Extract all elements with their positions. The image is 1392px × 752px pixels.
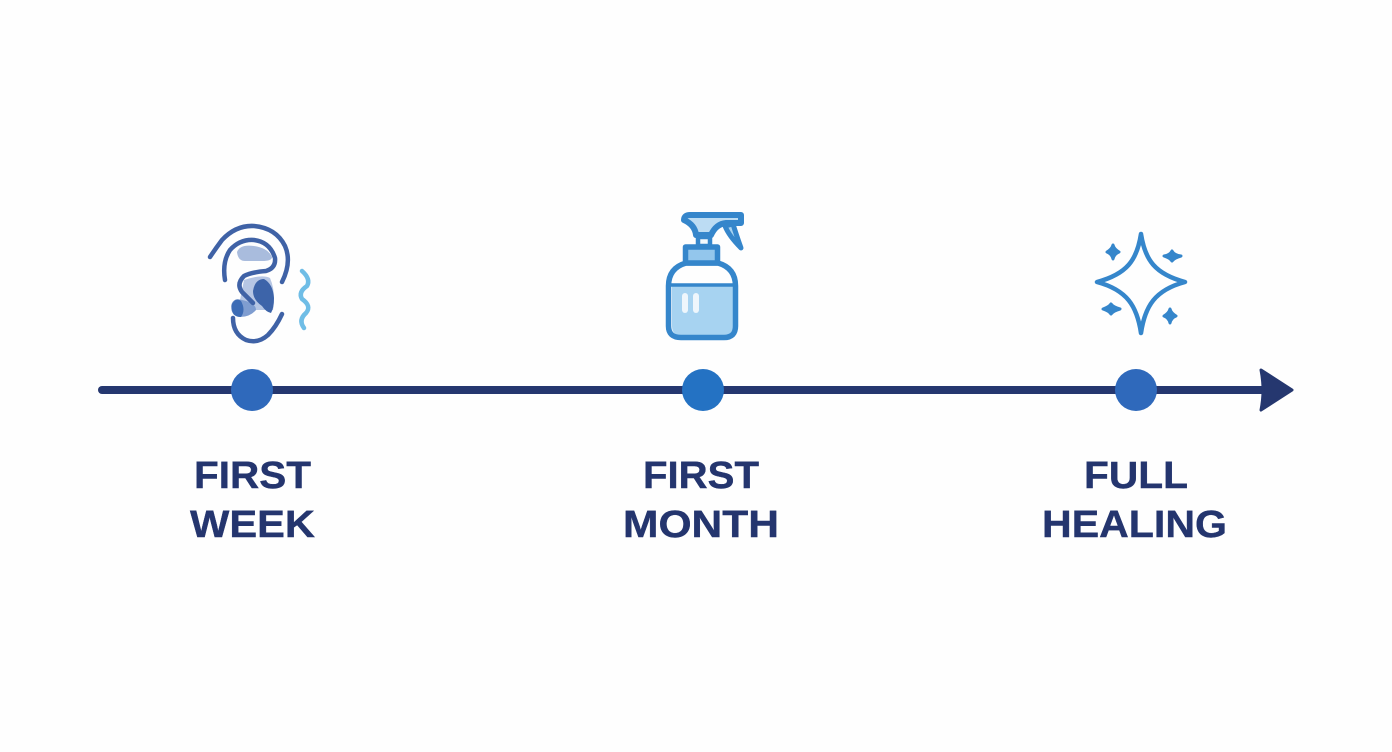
- timeline axis line: [102, 386, 1270, 394]
- icon: ear with sound wave: [210, 226, 308, 341]
- bottle collar: [686, 247, 718, 263]
- spray head: [684, 215, 741, 235]
- marker: full healing: [1115, 369, 1157, 411]
- liquid level line: [668, 283, 736, 287]
- sound wave: [301, 271, 308, 328]
- icon: sparkles: [1097, 234, 1185, 333]
- ear outer helix: [210, 226, 288, 282]
- label: first week: WEEK: [190, 504, 316, 546]
- label: full healing: HEALING: [1042, 504, 1227, 546]
- bottle liquid: [672, 286, 733, 336]
- small sparkle bottom right: [1164, 309, 1176, 323]
- label: first month: [623, 455, 779, 546]
- label: first week: [190, 455, 316, 546]
- ear inner fill shapes: [237, 246, 272, 261]
- bottle body: [668, 263, 736, 338]
- marker: first month: [682, 369, 724, 411]
- ear inner curve: [224, 240, 275, 303]
- liquid highlights: [685, 296, 696, 310]
- small sparkle top right: [1164, 251, 1181, 261]
- label: first month: FIRST: [643, 455, 759, 497]
- timeline: [102, 369, 1292, 411]
- label: full healing: FULL: [1084, 455, 1188, 497]
- label: first week: FIRST: [194, 455, 311, 497]
- label: first month: MONTH: [623, 504, 779, 546]
- label: full healing: [1042, 455, 1227, 546]
- spray trigger: [725, 224, 741, 248]
- marker: first week: [231, 369, 273, 411]
- arrow head: [1261, 370, 1292, 410]
- icon: spray bottle: [668, 215, 741, 338]
- sprayer neck: [698, 237, 710, 246]
- small sparkle bottom left: [1103, 304, 1120, 314]
- large star: [1097, 234, 1185, 333]
- small sparkle top left: [1107, 245, 1119, 259]
- ear lobe: [233, 314, 282, 341]
